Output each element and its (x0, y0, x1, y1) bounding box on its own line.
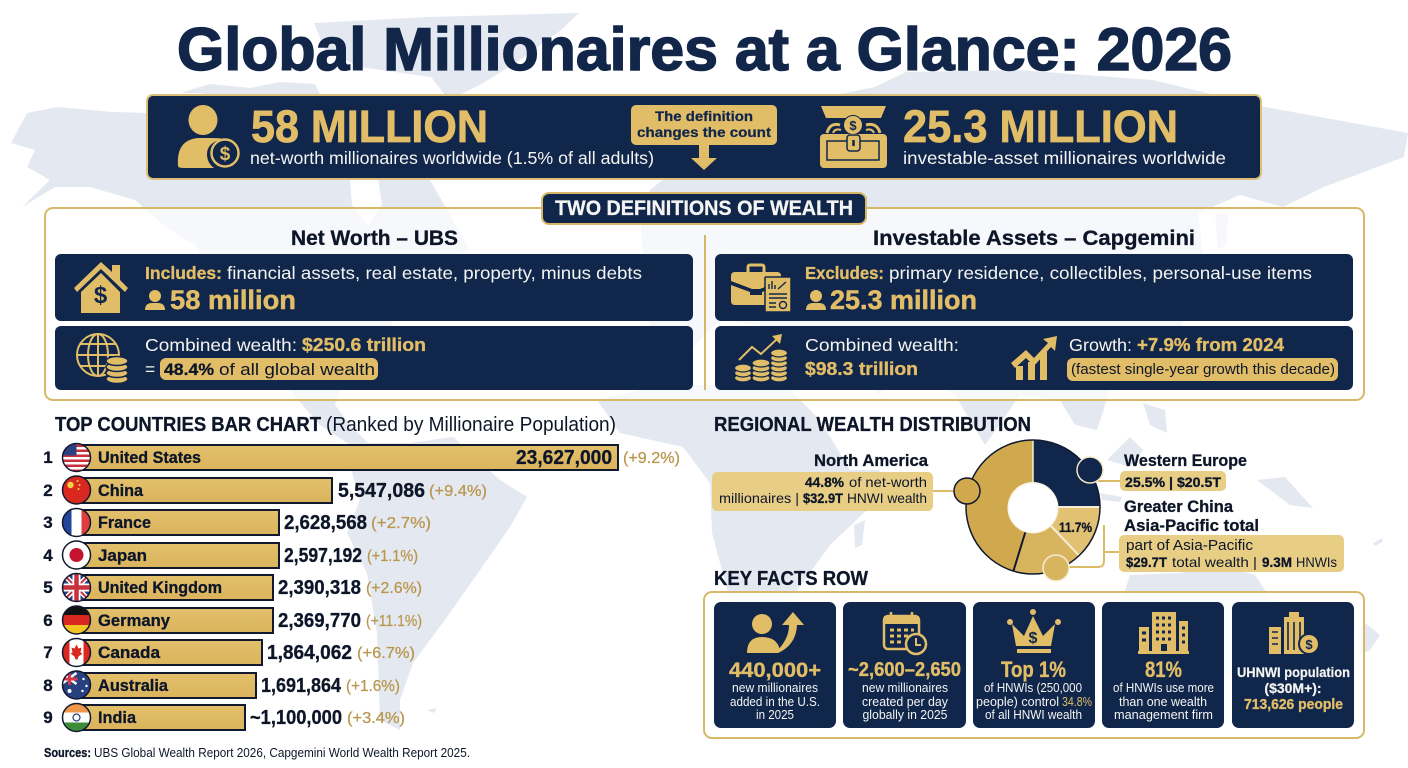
card: combined wealth investable and growth: $98.3 trillion (805, 359, 918, 379)
highlight: fastest growth: (fastest single-year growth this decade) (1071, 361, 1335, 378)
card: combined wealth net worth: = (145, 359, 155, 379)
highlight: 48.4% of all global wealth (160, 358, 378, 380)
heading: top countries bar chart: TOP COUNTRIES BAR CHART (55, 414, 321, 436)
row: United Kingdom: 2,390,318 (278, 577, 361, 599)
row: Japan: 4 (43, 546, 53, 565)
card: excludes (715, 254, 1353, 321)
icon: person (145, 290, 165, 310)
stat: 25.3 million: investable-asset millionaires worldwide (903, 148, 1226, 168)
heading: key facts row: KEY FACTS ROW (714, 568, 868, 590)
row: United Kingdom: 5 (43, 578, 53, 597)
row: United Kingdom: United Kingdom (98, 578, 222, 597)
callout: Greater China and Asia-Pacific (1119, 497, 1344, 572)
heading pill: two definitions of wealth: TWO DEFINITIONS OF WEALTH (555, 197, 853, 220)
row: India: 9 (43, 708, 53, 727)
icon: buildings with coin: $ (1305, 637, 1313, 652)
row: China: (+9.4%) (429, 483, 487, 500)
callout: Western Europe: 25.5% | $20.5T (1125, 474, 1221, 490)
card: combined wealth net worth (55, 326, 693, 390)
callout: Western Europe: Western Europe (1124, 451, 1247, 470)
card: new millionaires in the U.S.: in 2025 (756, 707, 794, 722)
row: Canada: Canada (98, 643, 161, 662)
icon: office buildings (1138, 612, 1189, 654)
icon: person (806, 290, 826, 310)
card: top 1% (973, 602, 1095, 728)
card: new millionaires in the U.S.: added in the U.S. (730, 694, 820, 709)
row: India: India (98, 708, 137, 727)
callout: North America: 44.8% (805, 474, 845, 490)
row: Japan: Japan (98, 546, 147, 565)
row: India: (+3.4%) (347, 710, 405, 727)
icon: globe with coins (77, 334, 128, 384)
icon: treasure chest (820, 106, 887, 168)
row: France: France (98, 513, 151, 532)
row: Japan: 2,597,192 (284, 545, 362, 567)
row: France: 3 (43, 513, 53, 532)
row: Germany: (+11.1%) (366, 613, 422, 630)
row: Australia: Australia (98, 676, 169, 695)
stat: 25.3 million (903, 101, 1226, 168)
card: new millionaires per day: ~2,600–2,650 (848, 659, 961, 681)
card: 81%: than one wealth (1119, 694, 1207, 709)
marker: Western Europe (1077, 457, 1103, 483)
heading: net worth: Net Worth – UBS (291, 227, 458, 250)
marker: North America (954, 478, 980, 504)
card: includes (55, 254, 693, 321)
card: top 1%: 34.8% (1062, 694, 1092, 709)
heading: top countries bar chart (55, 414, 616, 436)
callout: North America: North America (814, 451, 929, 470)
card: combined wealth net worth: Combined wealth: (145, 335, 297, 355)
sources: Sources: (44, 746, 91, 760)
icon: crown with dollar: $ (1029, 630, 1038, 647)
icon: rising bar chart (1011, 336, 1057, 380)
row: India: ~1,100,000 (250, 707, 342, 729)
stat: 25.3 million: 25.3 MILLION (903, 101, 1178, 152)
callout: North America: millionaires | (719, 490, 799, 506)
row: Japan (43, 540, 418, 570)
row: United States: 23,627,000 (516, 447, 612, 469)
card: UHNWI population (1232, 602, 1354, 728)
card: excludes: 25.3 million (830, 285, 977, 315)
card: top 1%: of HNWIs (250,000 (984, 680, 1082, 695)
slice: North America (966, 440, 1033, 571)
callout: the definition changes the count (631, 105, 777, 170)
row: Canada: (+6.7%) (357, 645, 415, 662)
row: Japan: (+1.1%) (367, 548, 418, 565)
callout: North America: $32.9T (803, 490, 843, 506)
icon: briefcase and certificate (731, 265, 791, 312)
card: includes: financial assets, real estate, property, minus debts (227, 263, 642, 283)
card: top 1%: of all HNWI wealth (985, 707, 1082, 722)
slice: Greater China (1050, 507, 1100, 556)
callout: Greater China and Asia-Pacific: total wealth | (1172, 554, 1257, 570)
icon: house with dollar (74, 262, 128, 313)
sources: UBS Global Wealth Report 2026, Capgemini World Wealth Report 2025. (94, 746, 470, 760)
row: United States: United States (98, 448, 201, 467)
row: Germany: 2,369,770 (278, 610, 361, 632)
card: top 1%: Top 1% (1001, 657, 1066, 682)
row: France (43, 508, 431, 538)
card: excludes: Excludes: (805, 263, 884, 283)
stat: 58 million (250, 101, 654, 168)
row: Australia (43, 670, 400, 700)
panel: key facts (704, 592, 1364, 738)
row: Germany: Germany (98, 611, 171, 630)
card: 81%: 81% (1145, 657, 1182, 682)
highlight: 48.4% of all global wealth: 48.4% (164, 360, 214, 379)
stat: 58 million: 58 MILLION (251, 101, 488, 152)
card: includes: 58 million (170, 285, 296, 315)
callout: Greater China and Asia-Pacific: $29.7T (1126, 554, 1167, 570)
row: United States: (+9.2%) (623, 450, 680, 467)
card: excludes: primary residence, collectibles, personal-use items (889, 263, 1312, 283)
card: UHNWI population: UHNWI population (1237, 664, 1350, 680)
icon: person with dollar coin (178, 105, 238, 168)
banner: headline counts (147, 95, 1261, 179)
card: new millionaires per day (843, 602, 966, 728)
row: France: 2,628,568 (284, 512, 367, 534)
row: United Kingdom: (+2.6%) (366, 580, 422, 597)
card: combined wealth investable and growth (715, 326, 1353, 390)
row: Canada: 7 (43, 643, 53, 662)
row: China: 2 (43, 481, 53, 500)
callout: North America: HNWI wealth (847, 490, 927, 506)
card: 81%: of HNWIs use more (1113, 680, 1214, 695)
card: combined wealth investable and growth: Growth: (1069, 335, 1132, 355)
callout: North America: of net-worth (849, 474, 927, 490)
row: India (43, 702, 405, 732)
row: United States (43, 442, 680, 472)
card: top 1%: people) control (976, 694, 1059, 709)
card: combined wealth investable and growth: Combined wealth: (805, 335, 959, 355)
donut chart: regional wealth (933, 440, 1121, 581)
row: China: China (98, 481, 144, 500)
panel: two definitions of wealth (45, 193, 1364, 400)
row: Germany (43, 605, 422, 635)
card: combined wealth net worth: $250.6 trillion (302, 335, 426, 355)
icon: person with dollar coin: $ (220, 144, 231, 165)
row: United Kingdom (43, 572, 422, 602)
row: Canada: 1,864,062 (267, 642, 352, 664)
slice: Western Europe (1033, 440, 1100, 507)
row: Germany: 6 (43, 611, 53, 630)
heading: top countries bar chart: (Ranked by Millionaire Population) (326, 414, 616, 436)
heading: investable assets: Investable Assets – Capgemini (873, 227, 1195, 250)
icon: coin stacks with trend line (734, 334, 788, 382)
row: France: (+2.7%) (371, 515, 431, 532)
highlight: 48.4% of all global wealth: of all global wealth (219, 360, 375, 379)
card: new millionaires in the U.S. (714, 602, 836, 728)
card: 81% (1102, 602, 1224, 728)
row: Canada (43, 638, 415, 668)
card: UHNWI population: 713,626 people (1244, 696, 1343, 713)
icon: person with up arrow (747, 612, 804, 653)
callout: Greater China and Asia-Pacific: 9.3M (1262, 554, 1292, 570)
card: new millionaires in the U.S.: new millionaires (732, 680, 818, 695)
card: 81%: management firm (1114, 707, 1213, 722)
callout: Western Europe (1120, 451, 1247, 491)
marker: Asia-Pacific (1043, 555, 1069, 581)
callout: the definition changes the count: changes the count (637, 124, 771, 140)
slice: Asia-Pacific (1013, 525, 1079, 574)
icon: calendar with clock (884, 612, 926, 654)
row: Australia: (+1.6%) (346, 678, 400, 695)
card: new millionaires per day: new millionaires (862, 680, 948, 695)
row: Australia: 1,691,864 (261, 675, 342, 697)
heading: regional wealth distribution: REGIONAL WEALTH DISTRIBUTION (714, 414, 1031, 436)
callout: Greater China and Asia-Pacific: Asia-Pacific total (1124, 516, 1259, 535)
row: China: 5,547,086 (338, 480, 425, 502)
bar chart: countries (43, 442, 680, 732)
callout: Greater China and Asia-Pacific: Greater China (1124, 497, 1234, 516)
card: new millionaires per day: created per day (862, 694, 948, 709)
row: Australia: 8 (43, 676, 53, 695)
card: new millionaires per day: globally in 2025 (862, 707, 948, 722)
stat: 58 million: net-worth millionaires worldwide (1.5% of all adults) (250, 148, 654, 168)
callout: the definition changes the count: The definition (655, 108, 753, 124)
row: United States: 1 (43, 448, 53, 467)
callout: North America (712, 451, 933, 511)
callout: Greater China and Asia-Pacific: part of Asia-Pacific (1126, 538, 1253, 554)
callout: Greater China and Asia-Pacific: HNWIs (1296, 554, 1337, 570)
title: Global Millionaires at a Glance: 2026 (177, 16, 1232, 83)
icon: house with dollar: $ (94, 282, 108, 309)
row: China (43, 475, 487, 505)
card: UHNWI population: ($30M+): (1264, 680, 1322, 696)
donut chart: regional wealth: 11.7% (1059, 519, 1092, 535)
card: new millionaires in the U.S.: 440,000+ (729, 659, 821, 682)
icon: treasure chest: $ (849, 118, 857, 133)
card: includes: Includes: (145, 263, 222, 283)
card: combined wealth investable and growth: +7.9% from 2024 (1137, 335, 1284, 355)
